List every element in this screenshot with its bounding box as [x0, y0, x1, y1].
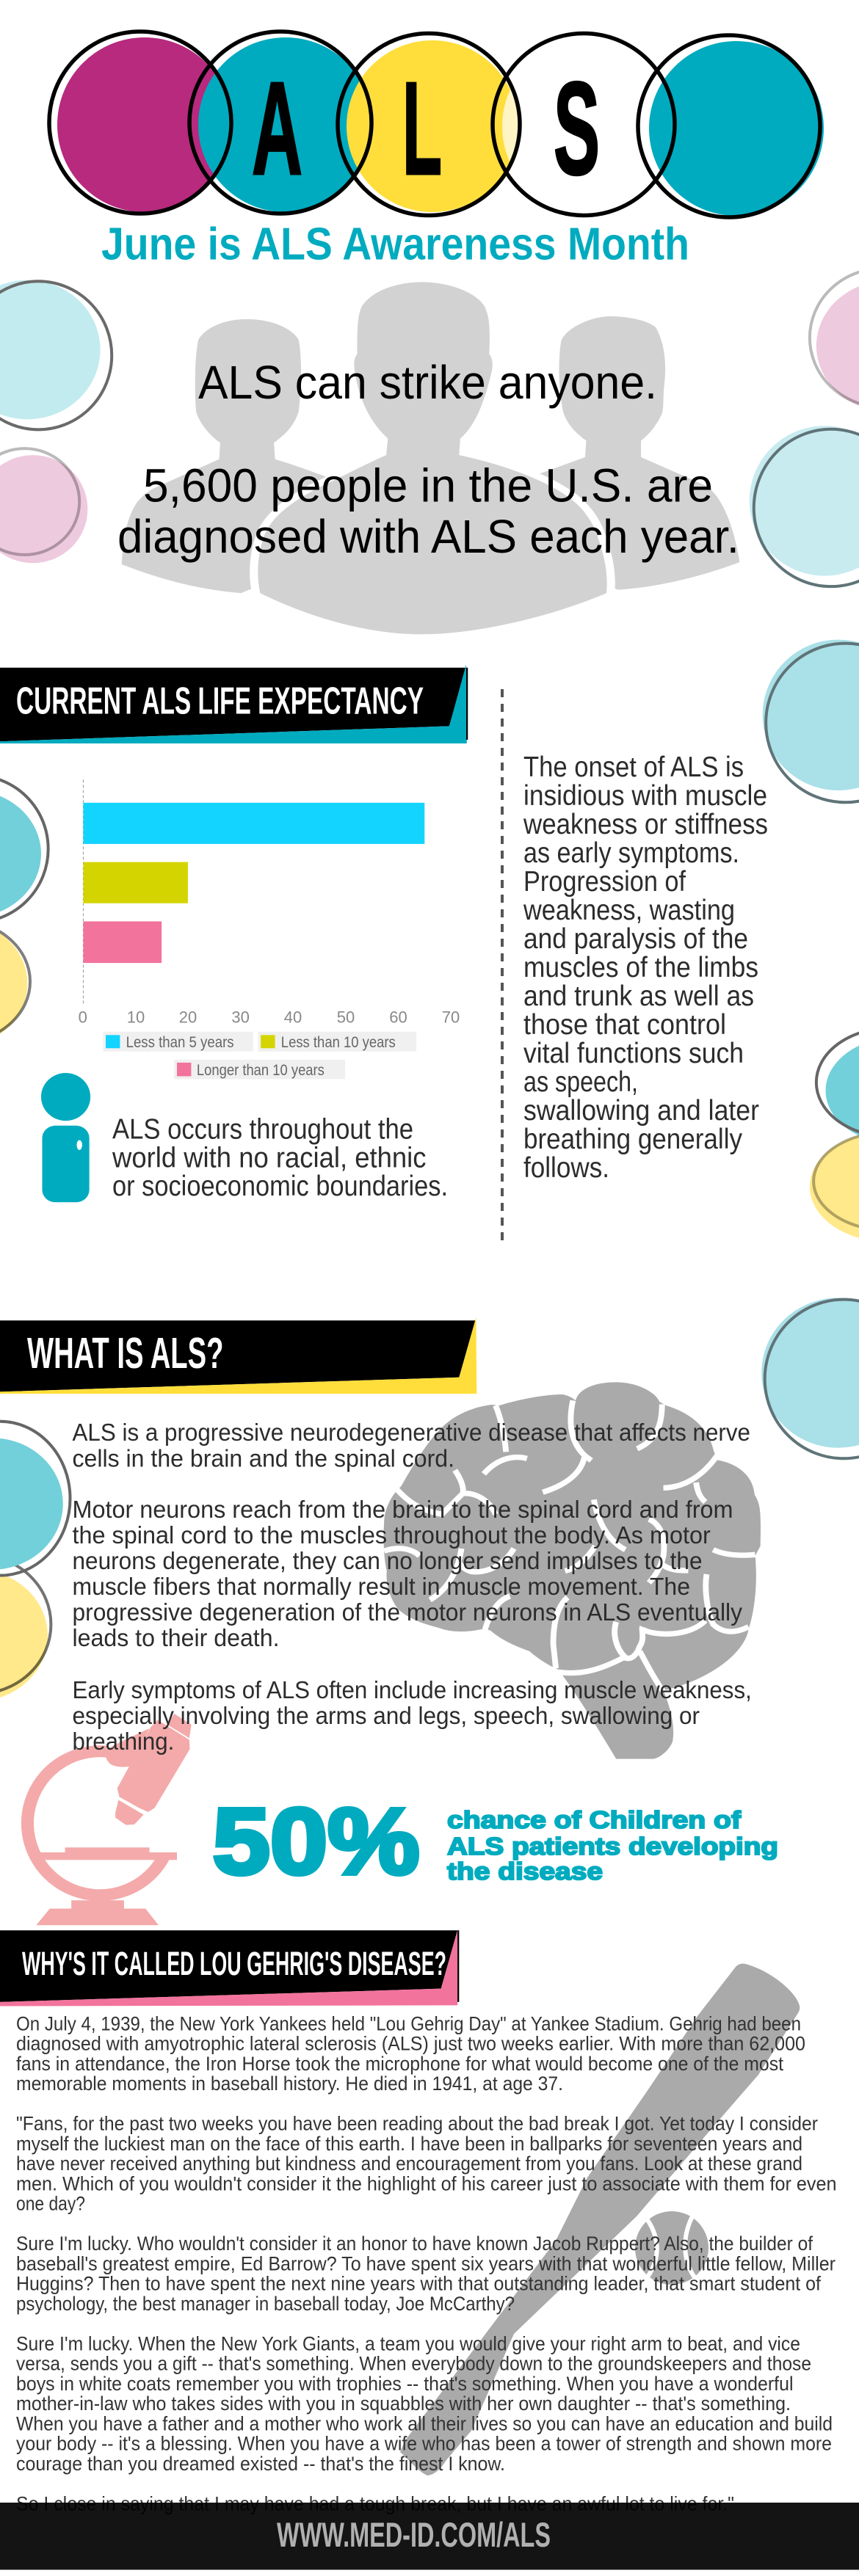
text: what is ALS body: ALS is a progressive neurodegenerative disease that affects nerve [72, 1419, 750, 1447]
text: onset of ALS: and trunk as well as [523, 980, 754, 1012]
text: onset of ALS: as speech, [523, 1066, 638, 1098]
text: onset of ALS: vital functions such [523, 1038, 744, 1069]
intro statistic text: diagnosed with ALS each year. [117, 510, 739, 563]
text: onset of ALS [523, 752, 768, 1184]
text: what is ALS body: neurons degenerate, they can no longer send impulses to the [72, 1548, 702, 1575]
heading: why is it called Lou Gehrig's disease: WHY'S IT CALLED LOU GEHRIG'S DISEASE? [22, 1945, 446, 1982]
text: Lou Gehrig speech: one day? [16, 2193, 85, 2215]
text: chance of children: chance of Children of [447, 1806, 742, 1833]
heading: current ALS life expectancy: CURRENT ALS LIFE EXPECTANCY [16, 680, 424, 723]
heading: why is it called Lou Gehrig's disease [0, 1930, 459, 2006]
statistic: 50%: 50% [213, 1789, 420, 1894]
text: onset of ALS: breathing generally [523, 1124, 742, 1155]
text: chance of children: ALS patients developing [447, 1833, 778, 1860]
text: onset of ALS: The onset of ALS is [523, 752, 744, 783]
logo: ALS circles: L [402, 55, 442, 203]
intro statistic text: ALS can strike anyone. [198, 356, 657, 409]
text: what is ALS body [72, 1419, 752, 1755]
text: onset of ALS: swallowing and later [523, 1095, 759, 1127]
text: ALS occurs throughout the world: ALS occurs throughout the [112, 1114, 413, 1146]
bar chart: ALS life expectancy: 0 [79, 1008, 87, 1026]
text: what is ALS body: leads to their death. [72, 1625, 279, 1652]
bar chart: ALS life expectancy: 70 [442, 1008, 460, 1026]
text: ALS occurs throughout the world: world with no racial, ethnic [112, 1142, 427, 1174]
bar chart: ALS life expectancy: 10 [127, 1008, 145, 1026]
bar chart: ALS life expectancy: 50 [337, 1008, 355, 1026]
decorative circles: what is ALS [0, 1298, 859, 1701]
text: Lou Gehrig speech: diagnosed with amyotrophic lateral sclerosis (ALS) just two weeks earlier. With more than 62,000 [16, 2033, 805, 2055]
text: onset of ALS: insidious with muscle [523, 780, 767, 812]
icon: brain [384, 1382, 761, 1759]
intro statistic text [117, 356, 739, 563]
logo: ALS circles: S [554, 55, 600, 203]
logo: ALS circles [49, 32, 824, 217]
icon: info [41, 1073, 90, 1202]
text: what is ALS body: breathing. [72, 1728, 174, 1755]
title: June is ALS Awareness Month [101, 219, 689, 270]
text: onset of ALS: follows. [523, 1152, 609, 1184]
footer bar: WWW.MED-ID.COM/ALS [277, 2515, 551, 2554]
text: ALS occurs throughout the world: or socioeconomic boundaries. [112, 1171, 448, 1202]
heading: what is ALS: WHAT IS ALS? [27, 1329, 223, 1378]
icon: three people silhouettes [122, 282, 739, 634]
text: Lou Gehrig speech: mother-in-law who takes sides with you in squabbles with her own daughter -- that's something. [16, 2393, 791, 2415]
decorative circles: intro [0, 269, 859, 586]
bar chart: ALS life expectancy: 30 [231, 1008, 250, 1026]
heading: what is ALS [0, 1317, 476, 1394]
footer bar [0, 2503, 859, 2570]
bar chart: ALS life expectancy: 20 [179, 1008, 197, 1026]
text: what is ALS body: the spinal cord to the muscles throughout the body. As motor [72, 1522, 711, 1549]
text: Lou Gehrig speech: Sure I'm lucky. When the New York Giants, a team you would give your right arm to beat, and vice [16, 2332, 800, 2354]
intro statistic text: 5,600 people in the U.S. are [143, 459, 713, 512]
text: onset of ALS: Progression of [523, 866, 686, 898]
text: Lou Gehrig speech [16, 2012, 837, 2514]
text: onset of ALS: as early symptoms. [523, 837, 739, 869]
bar chart: ALS life expectancy: Less than 5 years [126, 1034, 234, 1051]
text: onset of ALS: those that control [523, 1009, 726, 1041]
text: Lou Gehrig speech: memorable moments in baseball history. He died in 1941, at age 37. [16, 2073, 563, 2095]
decorative circles: life expectancy [0, 640, 859, 1242]
text: what is ALS body: cells in the brain and the spinal cord. [72, 1446, 454, 1472]
heading: current ALS life expectancy [0, 664, 468, 743]
text: what is ALS body: Motor neurons reach from the brain to the spinal cord and from [72, 1496, 733, 1524]
text: what is ALS body: especially involving the arms and legs, speech, swallowing or [72, 1703, 700, 1730]
icon: microscope [27, 1714, 192, 1925]
bar chart: ALS life expectancy: 40 [284, 1008, 302, 1026]
text: what is ALS body: progressive degeneration of the motor neurons in ALS eventually [72, 1599, 742, 1626]
text: ALS occurs throughout the world [112, 1114, 448, 1202]
text: Lou Gehrig speech: fans in attendance, the Iron Horse took the microphone for what would become one of the most [16, 2053, 783, 2075]
text: chance of children: the disease [447, 1858, 603, 1885]
dashed divider [501, 689, 504, 1241]
text: onset of ALS: weakness or stiffness [523, 809, 768, 840]
text: Lou Gehrig speech: myself the luckiest man on the face of this earth. I have been in ballparks for seventeen years and [16, 2133, 802, 2155]
bar chart: ALS life expectancy [79, 779, 460, 1079]
text: Lou Gehrig speech: courage than you dreamed existed -- that's the finest I know. [16, 2453, 505, 2475]
bar chart: ALS life expectancy: Longer than 10 years [197, 1062, 325, 1079]
text: chance of children [447, 1806, 778, 1885]
text: what is ALS body: Early symptoms of ALS often include increasing muscle weakness, [72, 1677, 752, 1704]
text: onset of ALS: muscles of the limbs [523, 952, 758, 983]
icon: baseball bat and ball [400, 1964, 800, 2475]
text: Lou Gehrig speech: boys in white coats remember you with trophies -- that's something. When you have a wonderful [16, 2373, 793, 2395]
logo: ALS circles: A [252, 55, 302, 203]
bar chart: ALS life expectancy: Less than 10 years [281, 1034, 396, 1051]
text: Lou Gehrig speech: So I close in saying that I may have had a tough break, but I have an awful lot to live for." [16, 2492, 734, 2514]
bar chart: ALS life expectancy: 60 [389, 1008, 407, 1026]
text: onset of ALS: weakness, wasting [523, 895, 735, 926]
text: Lou Gehrig speech: psychology, the best manager in baseball today, Joe McCarthy? [16, 2293, 515, 2315]
text: onset of ALS: and paralysis of the [523, 923, 748, 955]
text: what is ALS body: muscle fibers that normally result in muscle movement. The [72, 1573, 690, 1601]
